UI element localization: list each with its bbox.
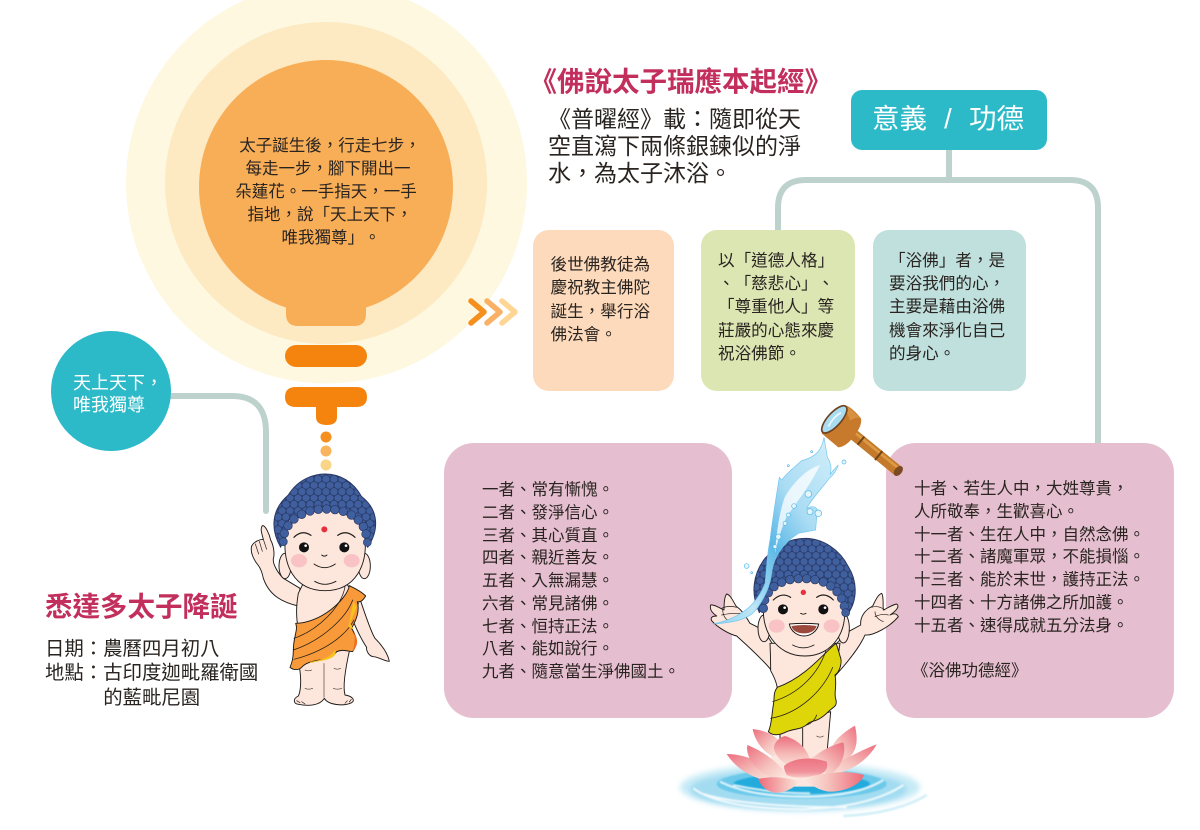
merits list: 五者、入無漏慧。 [482, 572, 614, 590]
water splash [713, 437, 846, 624]
connector tree: merit to boxes [778, 150, 1098, 443]
panel text: 後世佛教徒為 [550, 255, 650, 274]
legs [780, 712, 831, 757]
eyes [299, 526, 349, 552]
bulb text: 每走一步，腳下開出一 [246, 160, 410, 178]
connector: circle to baby [170, 396, 266, 511]
panel text: 祝浴佛節。 [718, 344, 801, 363]
merits list: 九者、隨意當生淨佛國土。 [482, 663, 680, 681]
sutra title: 《佛說太子瑞應本起經》 [530, 66, 832, 97]
merits list: 三者、其心質直。 [482, 527, 614, 545]
birth details: 日期：農曆四月初八 [45, 638, 220, 660]
legs [294, 648, 353, 705]
face [285, 510, 365, 591]
bulb text: 朵蓮花。一手指天，一手 [235, 183, 417, 201]
robe [768, 643, 841, 735]
callout circle [51, 331, 171, 451]
merits list: 七者、恒持正法。 [482, 618, 614, 636]
panel text: 慶祝教主佛陀 [550, 278, 650, 297]
raised arm [251, 526, 300, 606]
bulb text: 指地，說「天上天下， [248, 206, 412, 224]
panel text: 誕生，舉行浴 [550, 302, 650, 321]
water ripple [680, 763, 927, 816]
merits list: 六者、常見諸佛。 [482, 595, 614, 613]
character: pointing baby [251, 474, 389, 705]
panel text: 「尊重他人」等 [718, 297, 834, 316]
panel: merits one to nine [444, 443, 732, 718]
panel text: 要浴我們的心， [889, 274, 1005, 293]
sutra description: 空直瀉下兩條銀鍊似的淨 [548, 133, 801, 159]
panel text [889, 251, 1005, 363]
face lines [294, 533, 355, 537]
panel: attitude [701, 230, 855, 391]
sutra description: 《普曜經》載：隨即從天 [548, 106, 801, 132]
panel text: 的身心。 [889, 344, 955, 363]
cheeks [291, 554, 360, 567]
sutra description [548, 106, 801, 186]
robe [290, 586, 366, 670]
light bulb icon [126, 0, 527, 470]
merits list: 人所敬奉，生歡喜心。 [914, 503, 1079, 521]
lotus flower [727, 726, 877, 793]
eyes [778, 590, 828, 614]
merits list: 一者、常有慚愧。 [482, 481, 614, 499]
sutra description: 水，為太子沐浴。 [548, 160, 732, 186]
callout text: 天上天下， [73, 373, 163, 393]
bulb text: 唯我獨尊」。 [282, 229, 380, 247]
hair fringe [279, 505, 371, 546]
merits list: 二者、發淨信心。 [482, 504, 614, 522]
merits list [912, 480, 1145, 680]
merits list: 八者、能如說行。 [482, 640, 614, 658]
heading box: meaning and merit [851, 90, 1047, 150]
merits list: 十三者、能於末世，護持正法。 [914, 571, 1145, 589]
panel: merits ten to fifteen [886, 443, 1174, 718]
right arm [833, 593, 898, 676]
left arm [710, 594, 777, 671]
panel text: 佛法會。 [550, 325, 617, 344]
merits list: 十四者、十方諸佛之所加護。 [914, 594, 1128, 612]
merits list: 十二者、諸魔軍眾，不能損惱。 [914, 548, 1145, 566]
right arm [352, 597, 389, 661]
cheeks [769, 619, 840, 633]
face [763, 580, 845, 656]
callout text: 唯我獨尊 [73, 395, 145, 415]
panel: purify mind [873, 230, 1026, 391]
panel text: 以「道德人格」 [718, 251, 834, 270]
panel text: 莊嚴的心態來慶 [718, 321, 834, 340]
brows and mouth [773, 595, 833, 600]
hair [274, 474, 376, 547]
panel text: 機會來淨化自己 [889, 321, 1005, 340]
merits list: 四者、親近善友。 [482, 549, 614, 567]
bulb text [235, 136, 421, 247]
bulb text: 太子誕生後，行走七步， [239, 136, 421, 154]
merits list: 十一者、生在人中，自然念佛。 [914, 526, 1145, 544]
callout text [73, 373, 163, 415]
merits list [482, 480, 680, 681]
panel text [718, 251, 834, 363]
merits list: 十五者、速得成就五分法身。 [914, 617, 1128, 635]
birth details: 的藍毗尼園 [103, 687, 200, 709]
ears [279, 553, 291, 579]
heading: birth: 悉達多太子降誕 [45, 591, 238, 622]
panel text [550, 255, 650, 344]
torso [297, 583, 358, 647]
ladle [818, 402, 905, 478]
birth details: 地點：古印度迦毗羅衛國 [45, 662, 258, 684]
birth details [45, 638, 258, 709]
hair fringe [759, 574, 850, 617]
heading box: meaning and merit: 意義 / 功德 [872, 103, 1024, 134]
hair [754, 538, 855, 613]
chevron arrows [471, 301, 515, 323]
merits list: 《浴佛功德經》 [912, 662, 1028, 680]
panel: bathing assembly [533, 230, 674, 391]
torso [770, 643, 840, 703]
ears [758, 615, 770, 642]
merits list: 十者、若生人中，大姓尊貴， [914, 480, 1128, 498]
panel text: 主要是藉由浴佛 [889, 297, 1005, 316]
panel text: 「浴佛」者，是 [889, 251, 1005, 270]
character: bathing baby [710, 538, 898, 757]
panel text: 、「慈悲心」、 [718, 274, 834, 293]
